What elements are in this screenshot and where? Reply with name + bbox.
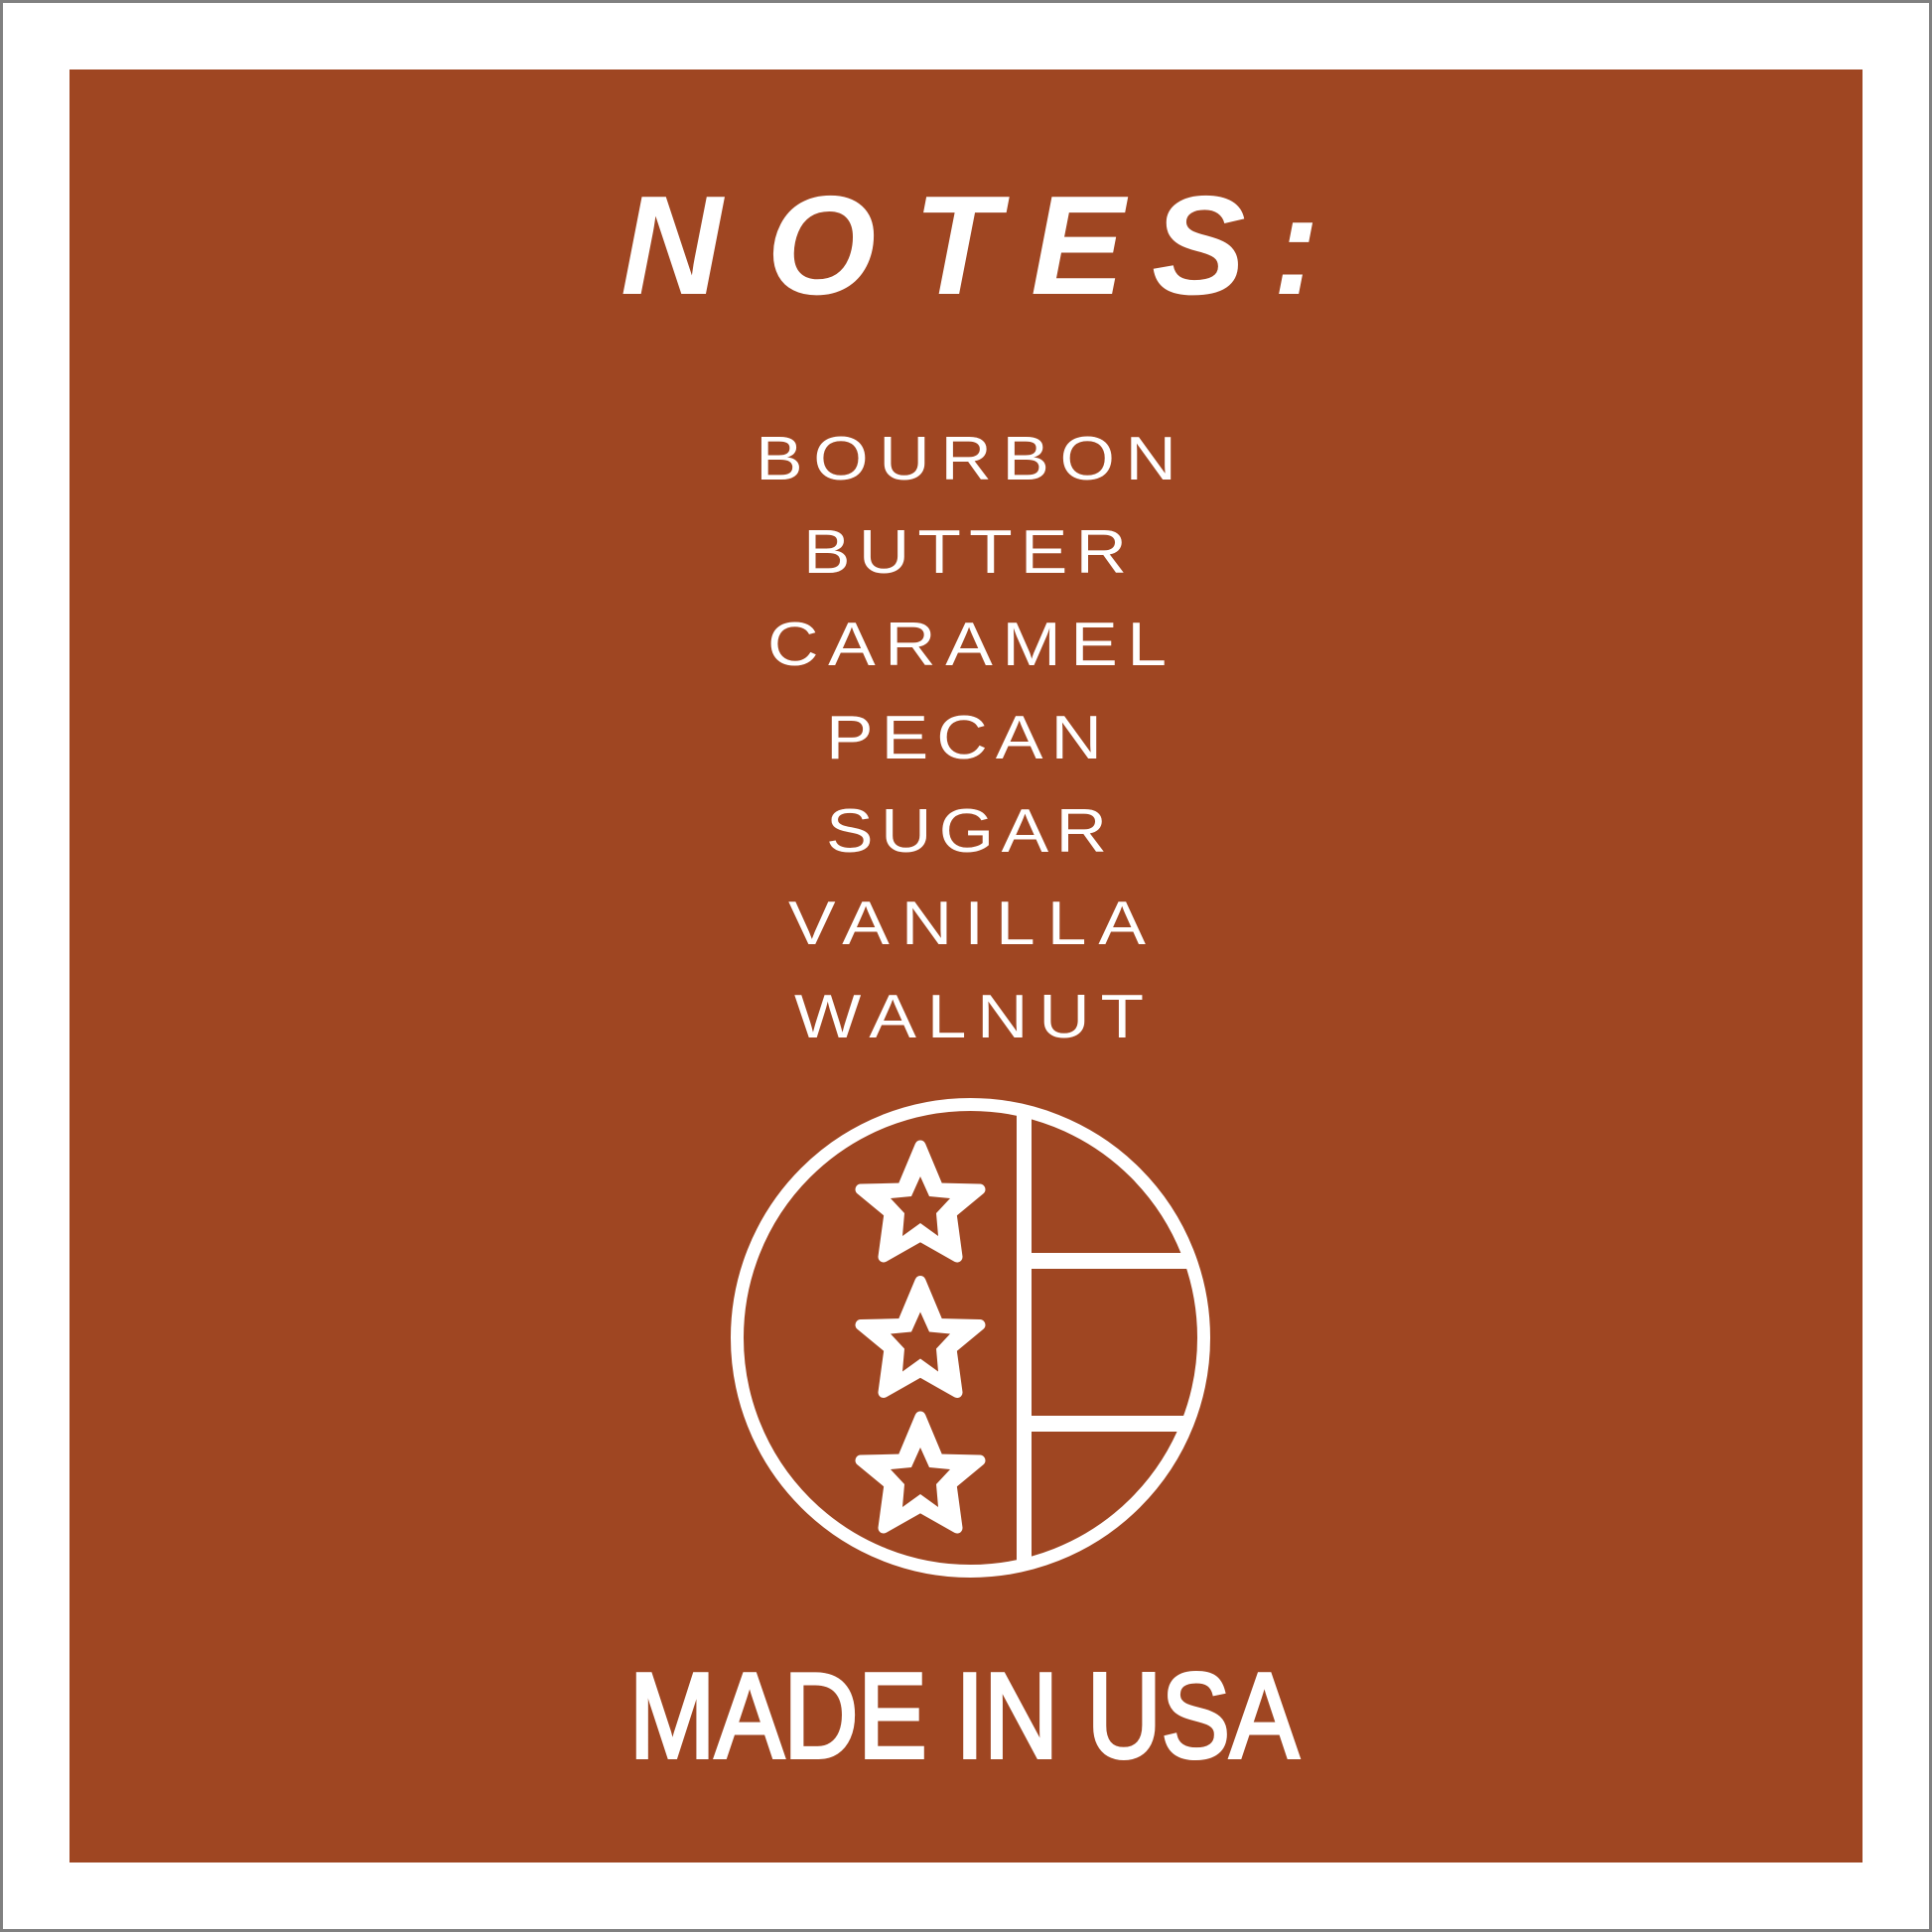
icon: star two [861,1281,980,1392]
made in USA label: MADE IN USA [629,1648,1300,1783]
icon: flag circle outline [737,1104,1203,1571]
note: vanilla: VANILLA [788,890,1146,958]
note: butter: BUTTER [803,518,1127,587]
note: caramel: CARAMEL [767,611,1167,679]
note: sugar: SUGAR [826,797,1107,866]
icon: three stars [861,1146,980,1528]
icon: flag stripes [1017,1116,1187,1561]
title: NOTES: [621,167,1319,325]
icon: round flag with three stars [731,1098,1210,1578]
list of flavor notes [756,425,1176,1051]
icon: star three [861,1417,980,1528]
note: pecan: PECAN [826,704,1102,772]
note: bourbon: BOURBON [756,425,1176,493]
icon: star one [861,1146,980,1257]
note: walnut: WALNUT [794,983,1144,1051]
